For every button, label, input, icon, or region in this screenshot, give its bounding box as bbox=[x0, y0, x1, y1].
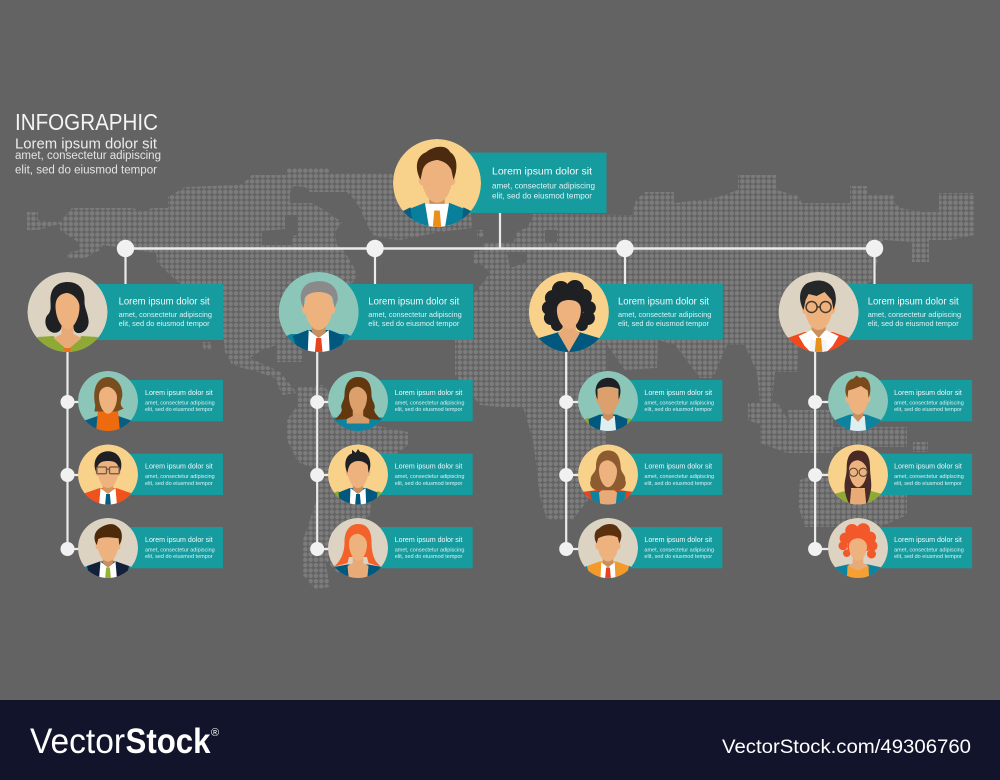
card: member 1a: amet, consectetur adipiscing bbox=[145, 400, 215, 406]
card: lead 3 bbox=[529, 272, 723, 356]
title block: Lorem ipsum dolor sit bbox=[15, 136, 157, 152]
card: member 1b: Lorem ipsum dolor sit bbox=[145, 462, 213, 471]
card: member 1c: Lorem ipsum dolor sit bbox=[145, 535, 213, 544]
avatar: woman light brown hair bbox=[578, 444, 638, 508]
card: lead 4: elit, sed do eiusmod tempor bbox=[868, 319, 959, 328]
card: member 3c: elit, sed do eiusmod tempor bbox=[644, 554, 712, 560]
card: member 1b bbox=[76, 444, 223, 506]
footer bar bbox=[0, 700, 1000, 780]
avatar: man rectangular glasses bbox=[76, 444, 140, 506]
avatar: man spiky black hair bbox=[328, 444, 388, 506]
title block: elit, sed do eiusmod tempor bbox=[15, 164, 157, 176]
panel: top manager: Lorem ipsum dolor sit bbox=[492, 165, 592, 177]
footer image id: VectorStock.com/49306760 bbox=[722, 737, 971, 758]
branch line 4 bbox=[808, 350, 833, 556]
avatar: woman with black hair bbox=[28, 272, 108, 354]
card: member 1c: amet, consectetur adipiscing bbox=[145, 548, 215, 554]
card: lead 4: amet, consectetur adipiscing bbox=[868, 310, 961, 319]
card: lead 2: elit, sed do eiusmod tempor bbox=[368, 319, 460, 328]
card: member 3c: amet, consectetur adipiscing bbox=[644, 548, 714, 554]
panel: top manager: elit, sed do eiusmod tempor bbox=[492, 192, 592, 200]
card: member 3a: elit, sed do eiusmod tempor bbox=[644, 407, 712, 413]
card: member 2a bbox=[326, 371, 473, 434]
card: member 3b: amet, consectetur adipiscing bbox=[644, 474, 714, 480]
footer logo: Stock bbox=[126, 722, 211, 761]
avatar: woman dark hair with glasses bbox=[828, 444, 888, 508]
avatar: man orange jacket bbox=[578, 518, 638, 580]
card: lead 1: Lorem ipsum dolor sit bbox=[119, 296, 210, 308]
avatar: man round glasses bbox=[777, 272, 861, 354]
card: lead 4 bbox=[777, 272, 973, 354]
card: member 3b: elit, sed do eiusmod tempor bbox=[644, 481, 712, 487]
avatar: man brown hair teal jacket bbox=[828, 371, 888, 432]
card: member 2c: Lorem ipsum dolor sit bbox=[395, 535, 462, 544]
footer logo: Vector bbox=[30, 722, 125, 761]
card: member 1a: Lorem ipsum dolor sit bbox=[145, 388, 213, 397]
branch line 1 bbox=[60, 350, 84, 556]
panel: top manager bbox=[391, 139, 606, 229]
card: member 3a: amet, consectetur adipiscing bbox=[644, 400, 714, 406]
card: member 2c: amet, consectetur adipiscing bbox=[395, 548, 464, 554]
card: member 1b: amet, consectetur adipiscing bbox=[145, 474, 215, 480]
avatar: woman curly black hair bbox=[529, 272, 609, 356]
card: lead 3: elit, sed do eiusmod tempor bbox=[618, 319, 709, 328]
card: lead 3: amet, consectetur adipiscing bbox=[618, 310, 711, 319]
card: member 1a bbox=[76, 371, 223, 432]
card: member 4a bbox=[828, 371, 972, 432]
card: member 2a: elit, sed do eiusmod tempor bbox=[395, 407, 462, 413]
card: member 4a: elit, sed do eiusmod tempor bbox=[894, 407, 962, 413]
card: member 3b bbox=[578, 444, 722, 508]
title block: amet, consectetur adipiscing bbox=[15, 150, 161, 162]
card: member 2b: amet, consectetur adipiscing bbox=[395, 474, 464, 480]
avatar: grey haired man bbox=[279, 272, 359, 354]
card: member 3a bbox=[578, 371, 722, 432]
card: member 4b bbox=[828, 444, 972, 508]
column 1 bbox=[28, 272, 224, 580]
card: member 4b: Lorem ipsum dolor sit bbox=[894, 462, 962, 471]
avatar: woman long wavy brown hair bbox=[326, 371, 390, 434]
card: member 3a: Lorem ipsum dolor sit bbox=[644, 388, 712, 397]
card: member 2c: elit, sed do eiusmod tempor bbox=[395, 554, 462, 560]
dotted world map bbox=[1, 171, 1000, 586]
card: member 4c bbox=[828, 518, 972, 581]
card: lead 2: Lorem ipsum dolor sit bbox=[368, 296, 460, 308]
card: member 3c bbox=[578, 518, 722, 580]
avatar: top manager bbox=[391, 139, 483, 229]
avatar: man dark suit bbox=[78, 518, 138, 580]
avatar: woman orange hair bbox=[328, 518, 388, 581]
card: member 4c: amet, consectetur adipiscing bbox=[894, 548, 964, 554]
card: lead 1: amet, consectetur adipiscing bbox=[119, 310, 212, 319]
column 2 bbox=[279, 272, 473, 581]
card: lead 4: Lorem ipsum dolor sit bbox=[868, 296, 959, 308]
card: member 4b: amet, consectetur adipiscing bbox=[894, 474, 964, 480]
card: member 4c: Lorem ipsum dolor sit bbox=[894, 535, 962, 544]
card: member 4a: amet, consectetur adipiscing bbox=[894, 400, 964, 406]
column 3 bbox=[529, 272, 723, 580]
avatar: woman orange curly hair bbox=[828, 518, 888, 581]
footer logo bbox=[30, 722, 219, 761]
card: lead 3: Lorem ipsum dolor sit bbox=[618, 296, 709, 308]
card: lead 2 bbox=[279, 272, 473, 354]
avatar: man black hair tan skin bbox=[578, 371, 638, 432]
column 4 bbox=[777, 272, 973, 581]
card: member 2b: elit, sed do eiusmod tempor bbox=[395, 481, 462, 487]
title block: INFOGRAPHIC bbox=[15, 109, 158, 135]
card: member 2b bbox=[328, 444, 473, 506]
card: lead 1 bbox=[28, 272, 224, 354]
card: member 4a: Lorem ipsum dolor sit bbox=[894, 388, 962, 397]
org chart connectors bbox=[117, 210, 883, 286]
card: member 2a: amet, consectetur adipiscing bbox=[395, 400, 464, 406]
title block bbox=[15, 109, 161, 176]
card: member 1c bbox=[78, 518, 223, 580]
card: member 4b: elit, sed do eiusmod tempor bbox=[894, 481, 962, 487]
card: member 3c: Lorem ipsum dolor sit bbox=[644, 535, 712, 544]
footer logo: ® bbox=[211, 727, 219, 739]
card: lead 1: elit, sed do eiusmod tempor bbox=[119, 319, 210, 328]
card: member 2b: Lorem ipsum dolor sit bbox=[395, 462, 462, 471]
branch line 3 bbox=[559, 350, 583, 556]
card: member 1c: elit, sed do eiusmod tempor bbox=[145, 554, 213, 560]
card: member 3b: Lorem ipsum dolor sit bbox=[644, 462, 712, 471]
avatar: woman brown bob bbox=[76, 371, 140, 432]
branch line 2 bbox=[310, 350, 334, 556]
card: member 2c bbox=[328, 518, 473, 581]
card: member 2a: Lorem ipsum dolor sit bbox=[395, 388, 462, 397]
card: member 4c: elit, sed do eiusmod tempor bbox=[894, 554, 962, 560]
card: member 1b: elit, sed do eiusmod tempor bbox=[145, 481, 213, 487]
panel: top manager: amet, consectetur adipiscing bbox=[492, 182, 595, 190]
card: member 1a: elit, sed do eiusmod tempor bbox=[145, 407, 213, 413]
card: lead 2: amet, consectetur adipiscing bbox=[368, 310, 462, 319]
